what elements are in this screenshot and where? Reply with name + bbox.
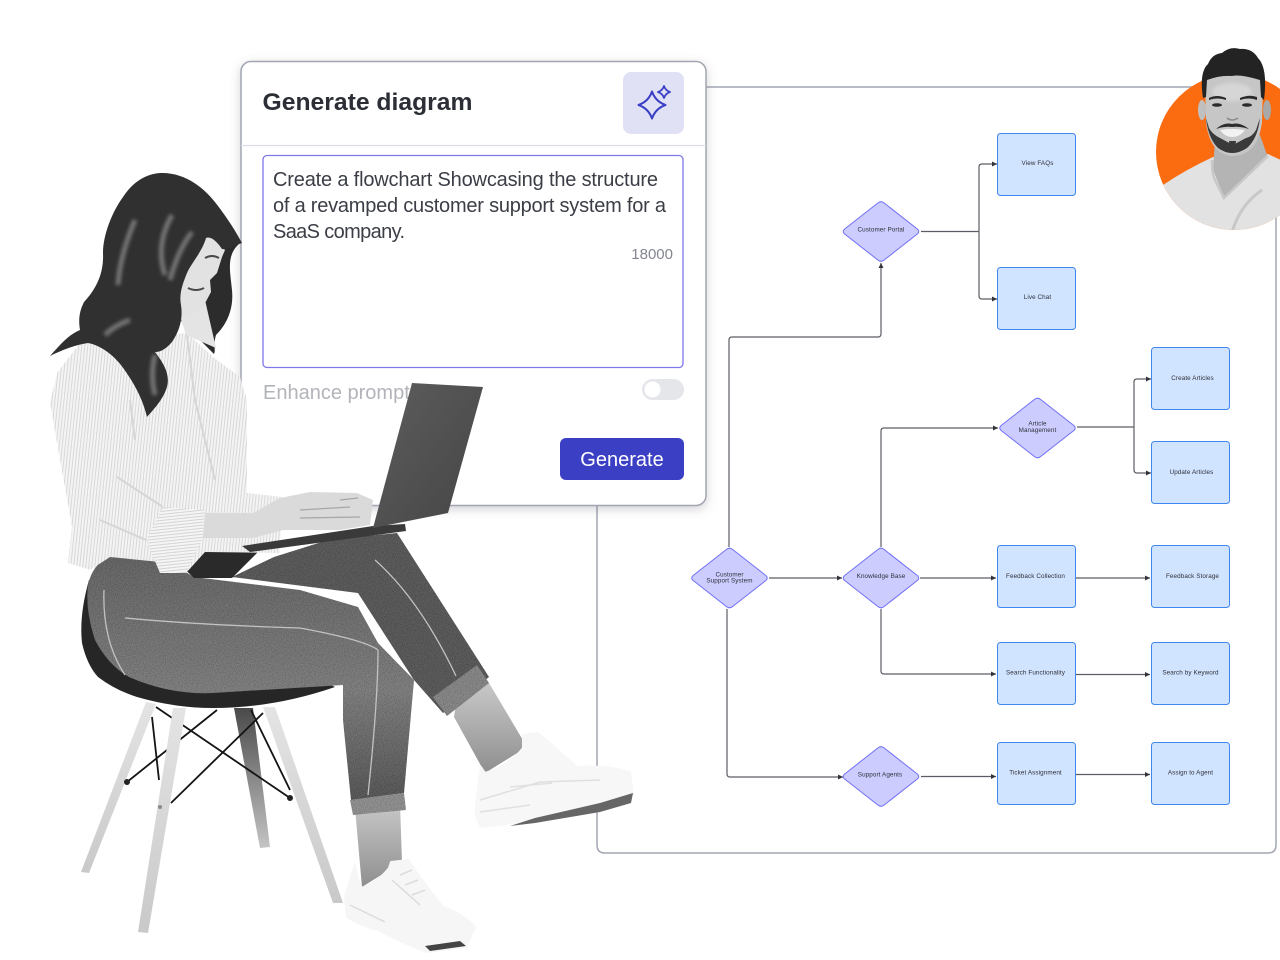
node: Customer Portal: Customer Portal xyxy=(858,226,904,234)
node: Feedback Storage xyxy=(1152,546,1230,608)
laptop lid xyxy=(373,383,483,528)
prompt text: of a revamped customer support system for a xyxy=(273,195,667,217)
facial features xyxy=(188,256,219,290)
cuff lower xyxy=(350,793,406,815)
jeans stitching xyxy=(104,560,456,795)
panel: flowchart canvas xyxy=(597,87,1276,853)
heading: Generate diagram xyxy=(262,89,472,116)
card surface xyxy=(241,62,706,506)
node: Support Agents xyxy=(843,747,919,806)
face xyxy=(176,232,225,317)
chair seat xyxy=(81,580,335,708)
node: Knowledge Base: Knowledge Base xyxy=(857,573,906,580)
node: Customer Support System: Customer xyxy=(715,572,744,578)
node: Feedback Collection xyxy=(998,546,1076,608)
node: Update Articles: Update Articles xyxy=(1170,469,1213,476)
sleeve folds and placket xyxy=(100,335,215,540)
rolled sleeve cuff xyxy=(146,507,205,573)
node: View FAQs: View FAQs xyxy=(1022,160,1053,167)
waistband shadow xyxy=(175,540,262,578)
divider xyxy=(241,144,706,146)
orange circle xyxy=(1156,74,1280,230)
node: Update Articles xyxy=(1152,442,1230,504)
node: Search by Keyword xyxy=(1152,642,1230,704)
node: Ticket Assignment: Ticket Assignment xyxy=(1009,770,1062,776)
character count: 18000 xyxy=(631,246,673,263)
forehead highlight xyxy=(1212,83,1252,101)
node: Assign to Agent xyxy=(1152,742,1230,804)
near leg calf xyxy=(454,683,527,773)
prompt text: Create a flowchart Showcasing the structure xyxy=(273,169,658,191)
node: Support Agents: Support Agents xyxy=(858,772,902,778)
cuff upper xyxy=(433,665,489,716)
illustration: woman on chair with laptop xyxy=(50,173,633,952)
node: View FAQs xyxy=(998,134,1076,196)
chair legs xyxy=(81,702,343,933)
node: Feedback Storage: Feedback Storage xyxy=(1166,573,1219,580)
hair xyxy=(1202,48,1265,100)
hair front layer xyxy=(50,173,242,417)
node: Customer Support System xyxy=(692,548,767,608)
prompt text: SaaS company. xyxy=(273,221,405,243)
face xyxy=(1205,70,1263,156)
node: Create Articles: Create Articles xyxy=(1171,375,1214,382)
panel border xyxy=(597,87,1276,853)
enhance prompt label: Enhance prompt xyxy=(263,382,410,404)
smile xyxy=(1220,129,1245,137)
thigh and lower leg xyxy=(87,555,414,800)
eyes and brows xyxy=(1209,96,1257,107)
node: Create Articles xyxy=(1152,348,1230,410)
node: Ticket Assignment xyxy=(998,742,1076,804)
v-neck collar xyxy=(1212,156,1268,198)
generate button xyxy=(560,438,684,480)
node: Article Management: Article xyxy=(1028,420,1047,428)
prompt text area xyxy=(263,156,683,368)
beard xyxy=(1206,118,1260,153)
shirt body xyxy=(50,333,282,573)
shirt fold xyxy=(1232,190,1262,232)
sneaker: lower xyxy=(345,860,475,952)
node: Knowledge Base xyxy=(843,548,919,608)
node: Live Chat: Live Chat xyxy=(1024,294,1051,301)
node: Search Functionality: Search Functionality xyxy=(1006,670,1066,676)
node: Feedback Collection: Feedback Collection xyxy=(1006,573,1065,580)
node: Live Chat xyxy=(998,268,1076,330)
generate button: Generate xyxy=(580,449,664,471)
upper crossed leg xyxy=(232,533,489,713)
t-shirt xyxy=(1163,154,1280,230)
hair back layer xyxy=(180,240,240,354)
nose shadow xyxy=(1227,118,1238,120)
laptop base xyxy=(242,524,406,552)
node: Assign to Agent: Assign to Agent xyxy=(1168,770,1213,776)
avatar: smiling man on orange circle xyxy=(1150,48,1280,240)
sneaker: upper xyxy=(476,733,633,827)
jeans xyxy=(87,533,489,815)
neck xyxy=(178,300,216,348)
node: Article Management: Management xyxy=(1019,427,1057,434)
node: Article Management xyxy=(1000,398,1075,458)
icon: sparkle xyxy=(623,72,684,134)
node: Search by Keyword: Search by Keyword xyxy=(1162,670,1219,676)
panel: generate diagram card xyxy=(241,62,706,506)
node: Search Functionality xyxy=(998,642,1076,704)
shirt xyxy=(50,333,282,573)
node: Customer Support System: Support System xyxy=(706,578,753,584)
node: Customer Portal xyxy=(843,202,919,261)
chin beard xyxy=(1229,141,1236,150)
neck xyxy=(1213,135,1267,197)
toggle xyxy=(642,379,684,400)
far leg calf xyxy=(355,803,402,887)
hair highlights xyxy=(105,215,192,395)
ears xyxy=(1198,100,1206,120)
flowchart connectors xyxy=(727,164,1151,777)
forearm and hand xyxy=(203,492,373,538)
moustache xyxy=(1216,124,1249,129)
finger lines xyxy=(300,498,360,518)
